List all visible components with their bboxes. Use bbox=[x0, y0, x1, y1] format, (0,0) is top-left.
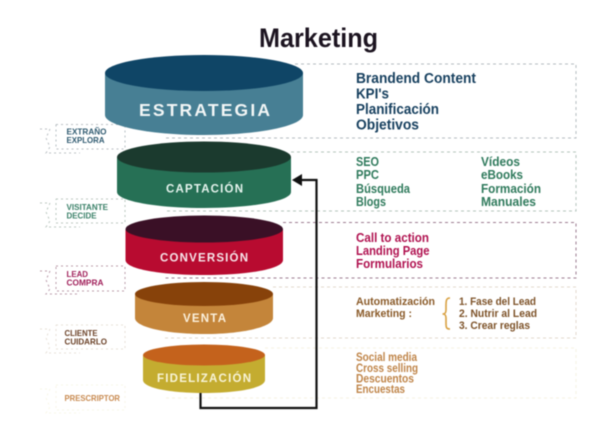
panel: estrategia details: KPI's bbox=[356, 86, 389, 102]
panel: captación details: Manuales bbox=[481, 195, 536, 209]
title: Marketing bbox=[259, 23, 378, 53]
label: cliente cuidarlo bbox=[40, 325, 125, 353]
label: visitante decide: DECIDE bbox=[66, 210, 97, 220]
panel: venta details: Automatización bbox=[356, 296, 435, 308]
label: lead compra: LEAD bbox=[66, 269, 88, 279]
label: lead compra bbox=[40, 266, 125, 294]
cylinder: captación: CAPTACIÓN bbox=[166, 182, 243, 196]
panel: captación details: PPC bbox=[356, 168, 379, 182]
panel: estrategia details bbox=[164, 64, 576, 138]
cylinder: fidelización bbox=[143, 344, 265, 393]
panel: captación details: Formación bbox=[481, 182, 541, 196]
panel: fidelización details: Descuentos bbox=[356, 374, 414, 386]
panel: captación details: eBooks bbox=[481, 168, 523, 182]
panel: captación details: Búsqueda bbox=[356, 182, 411, 196]
cylinder: conversión bbox=[126, 216, 283, 275]
panel: estrategia details: Brandend Content bbox=[356, 71, 476, 87]
panel: conversión details: Landing Page bbox=[356, 244, 430, 258]
cylinder: conversión: CONVERSIÓN bbox=[160, 252, 248, 264]
cylinder: venta: VENTA bbox=[183, 313, 226, 325]
panel: estrategia details: Planificación bbox=[356, 102, 439, 118]
panel: fidelización details: Encuestas bbox=[356, 384, 405, 396]
panel: venta details: Marketing : bbox=[356, 308, 412, 320]
label: visitante decide bbox=[40, 199, 125, 227]
label: cliente cuidarlo: CUIDARLO bbox=[64, 336, 107, 346]
panel: captación details bbox=[164, 152, 576, 211]
panel: conversión details: Call to action bbox=[356, 231, 429, 245]
panel: captación details: Vídeos bbox=[481, 155, 520, 169]
cylinder: venta bbox=[135, 282, 273, 334]
panel: fidelización details bbox=[164, 348, 576, 398]
panel: conversión details bbox=[164, 222, 576, 278]
label: cliente cuidarlo: CLIENTE bbox=[64, 328, 98, 338]
cylinder: estrategia bbox=[105, 55, 303, 135]
arrow: feedback loop bbox=[200, 174, 316, 408]
panel: conversión details: Formularios bbox=[356, 257, 423, 271]
panel: captación details: SEO bbox=[356, 155, 379, 169]
panel: fidelización details: Social media bbox=[356, 352, 418, 364]
label: prescriptor bbox=[40, 385, 125, 413]
label: visitante decide: VISITANTE bbox=[66, 202, 108, 212]
label: lead compra: COMPRA bbox=[66, 278, 104, 288]
panel: venta details bbox=[164, 287, 576, 338]
label: extraño explora bbox=[40, 124, 125, 153]
panel: captación details: Blogs bbox=[356, 195, 386, 209]
panel: fidelización details: Cross selling bbox=[356, 363, 418, 375]
label: prescriptor: PRESCRIPTOR bbox=[64, 393, 120, 403]
cylinder: captación bbox=[117, 142, 291, 208]
panel: venta details: 3. Crear reglas bbox=[459, 320, 530, 332]
panel: estrategia details: Objetivos bbox=[356, 118, 419, 134]
panel: venta details: 1. Fase del Lead bbox=[459, 296, 536, 308]
cylinder: estrategia: ESTRATEGIA bbox=[139, 100, 270, 120]
panel: venta details: 2. Nutrir al Lead bbox=[459, 308, 537, 320]
icon: brace bbox=[442, 298, 450, 329]
label: extraño explora: EXPLORA bbox=[66, 135, 104, 145]
label: extraño explora: EXTRAÑO bbox=[66, 126, 107, 136]
cylinder: fidelización: FIDELIZACIÓN bbox=[157, 372, 251, 385]
